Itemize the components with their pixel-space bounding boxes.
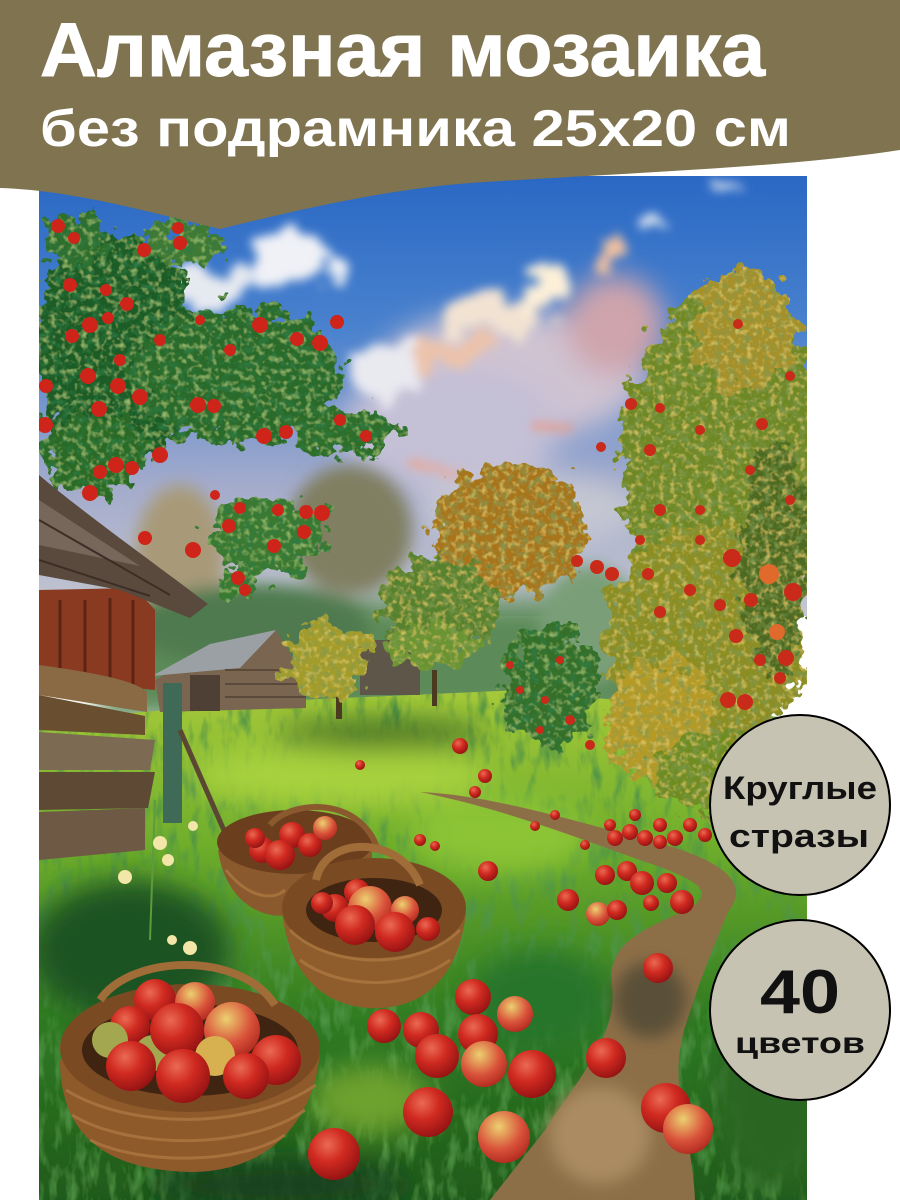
painting: apple orchard [30,176,835,1200]
badge: round rhinestones: стразы [729,818,869,854]
right low apple bush [502,623,598,747]
badge: 40 colours [710,920,890,1100]
badge: 40 colours: 40 [760,958,840,1027]
heading: subtitle: без подрамника 25х20 см [40,100,791,158]
middle basket [282,847,466,1008]
apples in baskets [92,816,440,1103]
left tree foliage [30,210,400,599]
clouds [160,187,730,545]
badge: round rhinestones [710,715,890,895]
title banner [0,0,900,229]
meadow [39,690,807,1200]
badge: round rhinestones: Круглые [723,770,877,806]
heading: main title: Алмазная мозаика [40,8,766,93]
cabin [39,475,226,860]
flowers [118,800,198,955]
path [420,792,736,1200]
front basket [60,870,460,1172]
apples on right tree [506,319,802,750]
back basket [217,807,378,916]
sky [39,176,807,616]
right tree foliage [605,268,830,817]
badge: 40 colours: цветов [735,1027,865,1060]
small trees and far barn [152,621,474,719]
apples on left tree [37,219,372,596]
apples on the ground [308,738,713,1180]
distant trees [100,462,660,720]
